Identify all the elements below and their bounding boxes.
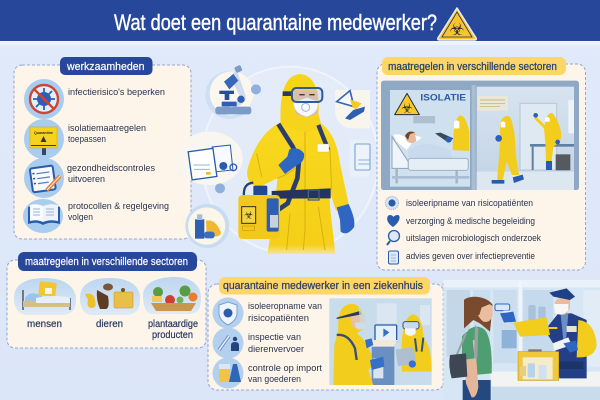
panel: maatregelen in verschillende sectoren (rechts) [377, 57, 586, 270]
counter [490, 372, 600, 387]
illustration: airport inspection scene [443, 280, 600, 400]
text: protocollen & regelgeving volgen [68, 201, 169, 223]
title: Wat doet een quarantaine medewerker? [114, 10, 437, 35]
icon: file card [349, 140, 370, 177]
icon: warning sign: ☣ [401, 102, 413, 117]
icon: warning sign [395, 93, 419, 117]
text: infectierisico's beperken: infectierisico's beperken [68, 87, 165, 98]
central hero illustration [176, 65, 378, 254]
illustration: two workers with laptop [329, 298, 432, 385]
respirator mask [293, 97, 318, 117]
text: uitslagen: uitslagen microbiologisch onderzoek [406, 233, 541, 244]
panel: maatregelen in verschillende sectoren (links) [7, 252, 206, 348]
icon: thermometer and bottle [212, 328, 244, 358]
text: inspectie: inspectie van [248, 332, 301, 343]
panel edge [442, 283, 444, 385]
text: gezondheidscontroles uitvoeren: gezondheidscontroles [67, 163, 155, 174]
figure: inspection officer [513, 288, 597, 378]
icon: microscope [205, 65, 261, 119]
heading: maatregelen rechts [382, 57, 566, 75]
laptop on cart [366, 325, 398, 385]
hood [280, 74, 322, 132]
heading: ziekenhuis [219, 277, 430, 294]
card: mensen bed [14, 278, 76, 315]
text: plantaardige producten: plantaardige [148, 319, 198, 330]
glove on strap [278, 148, 304, 174]
card: plantaardige producten basket [143, 277, 201, 314]
heading: maatregelen links: maatregelen in verschillende sectoren [25, 256, 188, 268]
heading: maatregelen links [18, 252, 197, 271]
icon: shield [212, 298, 244, 328]
text: controle: van goederen [248, 374, 301, 385]
heading: maatregelen rechts: maatregelen in verschillende sectoren [388, 61, 557, 73]
text: protocollen & regelgeving volgen: protocollen & regelgeving [68, 201, 169, 212]
thermometer scanner [495, 304, 516, 323]
header banner [0, 0, 600, 45]
text: isoleeropname: isoleeropname van [248, 301, 322, 312]
panel: werkzaamheden [14, 57, 191, 239]
panel: quarantaine medewerker in een ziekenhuis [208, 277, 444, 390]
icon: virus cell [386, 196, 398, 210]
heading: werkzaamheden: werkzaamheden [66, 61, 144, 73]
figure: worker in yellow suit: ☣ [244, 209, 254, 222]
icon: document [388, 251, 398, 264]
text: isolatiemaatregelen toepassen: toepassen [68, 134, 106, 145]
figure: front worker [333, 304, 384, 385]
text: inspectie: dierenvervoer [248, 344, 304, 355]
straps [275, 124, 299, 212]
icon: clipboard with pencil [24, 158, 64, 198]
icon: quarantine sign [24, 119, 64, 159]
heading: werkzaamheden [60, 57, 152, 75]
figure: worker in yellow suit [238, 74, 354, 254]
text: isolatiemaatregelen toepassen: isolatiemaatregelen [68, 123, 146, 134]
id badge [317, 144, 329, 152]
text: verzorging: verzorging & medische begeleiding [406, 216, 535, 227]
icon: heart care [387, 215, 400, 227]
illustration: patient in bed [392, 132, 469, 183]
text: inspectie [248, 332, 304, 355]
text: controle: controle op import [248, 363, 322, 374]
text: protocollen & regelgeving volgen: volgen [68, 212, 93, 223]
icon: magnifier [387, 230, 400, 245]
illustration: isolation room [381, 81, 579, 190]
text: gezondheidscontroles uitvoeren [67, 163, 155, 185]
text: isoleeropname: risicopatiënten [248, 313, 309, 324]
label: ISOLATIE: ISOLATIE [420, 93, 466, 103]
figure: worker at door [533, 113, 561, 170]
goggles [283, 91, 293, 96]
icon: biohazard warning triangle [438, 8, 476, 40]
icon: quarantine sign: Quarantine [34, 131, 53, 135]
belt [272, 188, 331, 199]
text: controle [248, 363, 322, 385]
heading: ziekenhuis: quarantaine medewerker in een ziekenhuis [223, 280, 423, 292]
figure: back worker [396, 314, 432, 372]
icon: import goods [212, 358, 244, 388]
icon: hand gel bottle [185, 204, 229, 248]
icon: documents and stethoscope [176, 132, 243, 193]
text: plantaardige producten [148, 319, 198, 341]
figure: traveller woman [449, 297, 493, 400]
figure: nurse in isolation [435, 115, 469, 151]
icon: biohazard warning triangle: ☣ [449, 20, 465, 40]
text: gezondheidscontroles uitvoeren: uitvoeren [68, 174, 105, 185]
text: mensen: mensen [27, 319, 62, 330]
text: isolatiemaatregelen toepassen [68, 123, 146, 145]
icon: virus crossed out [24, 79, 64, 119]
text: isoleeripname: isoleeripname van risicopatiënten [406, 198, 533, 209]
figure: walking worker [492, 116, 524, 184]
right glove [337, 204, 354, 233]
text: dieren: dieren [96, 319, 123, 330]
card: dieren [80, 278, 140, 315]
icon: megaphone [335, 90, 370, 128]
tank backpack [244, 183, 253, 197]
text: isoleeropname [248, 301, 322, 324]
text: plantaardige producten: producten [152, 330, 193, 341]
yellow case [518, 349, 559, 380]
text: advies: advies geven over infectiepreventie [406, 251, 535, 262]
icon: open book [23, 199, 63, 233]
